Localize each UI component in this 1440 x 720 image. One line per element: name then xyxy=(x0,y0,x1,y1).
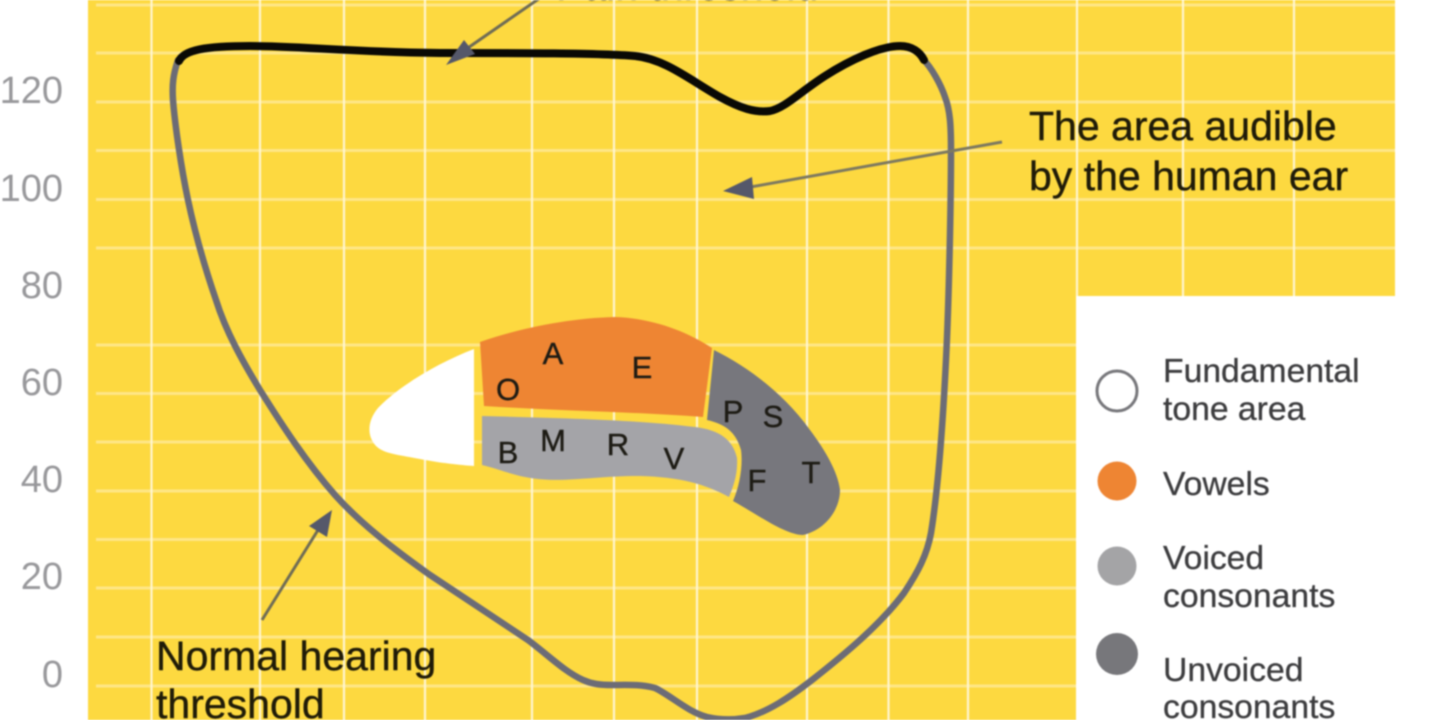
legend item: unvoiced consonants: Unvoiced xyxy=(1163,651,1303,689)
arrow: pain threshold xyxy=(446,0,540,65)
speech banana xyxy=(369,317,840,535)
legend item: fundamental tone area: tone area xyxy=(1163,390,1306,428)
legend item: voiced consonants xyxy=(1098,539,1335,615)
phoneme letters xyxy=(496,336,821,498)
normal hearing threshold label: Normal hearing xyxy=(156,633,436,679)
arrow: normal hearing threshold xyxy=(262,510,332,620)
legend xyxy=(1096,352,1360,720)
phoneme letters: F xyxy=(748,463,766,498)
voiced consonants area xyxy=(482,416,737,497)
normal hearing threshold curve xyxy=(173,58,951,719)
phoneme letters: T xyxy=(802,455,821,490)
legend item: voiced consonants: consonants xyxy=(1163,577,1335,615)
legend item: vowels: Vowels xyxy=(1163,465,1270,503)
phoneme letters: P xyxy=(723,394,743,429)
fundamental tone area xyxy=(369,349,474,466)
y-axis labels: 20 xyxy=(21,556,63,598)
legend item: unvoiced consonants xyxy=(1096,633,1335,720)
phoneme letters: E xyxy=(632,350,652,385)
audible area label: The area audible xyxy=(1029,103,1337,149)
y-axis labels: 40 xyxy=(21,459,63,501)
phoneme letters: M xyxy=(540,423,566,458)
arrow: audible area xyxy=(723,142,1002,199)
y-axis labels: 0 xyxy=(42,654,63,696)
phoneme letters: O xyxy=(496,372,520,407)
y-axis labels: 120 xyxy=(0,70,63,112)
unvoiced consonants area xyxy=(707,350,840,535)
y-axis labels: 100 xyxy=(0,168,63,210)
phoneme letters: A xyxy=(543,336,564,371)
legend item: voiced consonants: Voiced xyxy=(1163,539,1264,577)
phoneme letters: R xyxy=(607,427,629,462)
phoneme letters: V xyxy=(664,441,685,476)
phoneme letters: B xyxy=(498,435,518,470)
y-axis labels xyxy=(0,70,63,696)
legend item: fundamental tone area xyxy=(1097,352,1360,428)
phoneme letters: S xyxy=(763,399,783,434)
y-axis labels: 80 xyxy=(21,265,63,307)
audible area label: by the human ear xyxy=(1029,153,1348,199)
legend item: vowels xyxy=(1098,462,1270,503)
pain threshold curve xyxy=(179,46,924,111)
y-axis labels: 60 xyxy=(21,362,63,404)
legend item: fundamental tone area: Fundamental xyxy=(1163,352,1360,390)
vowels area xyxy=(480,317,712,417)
